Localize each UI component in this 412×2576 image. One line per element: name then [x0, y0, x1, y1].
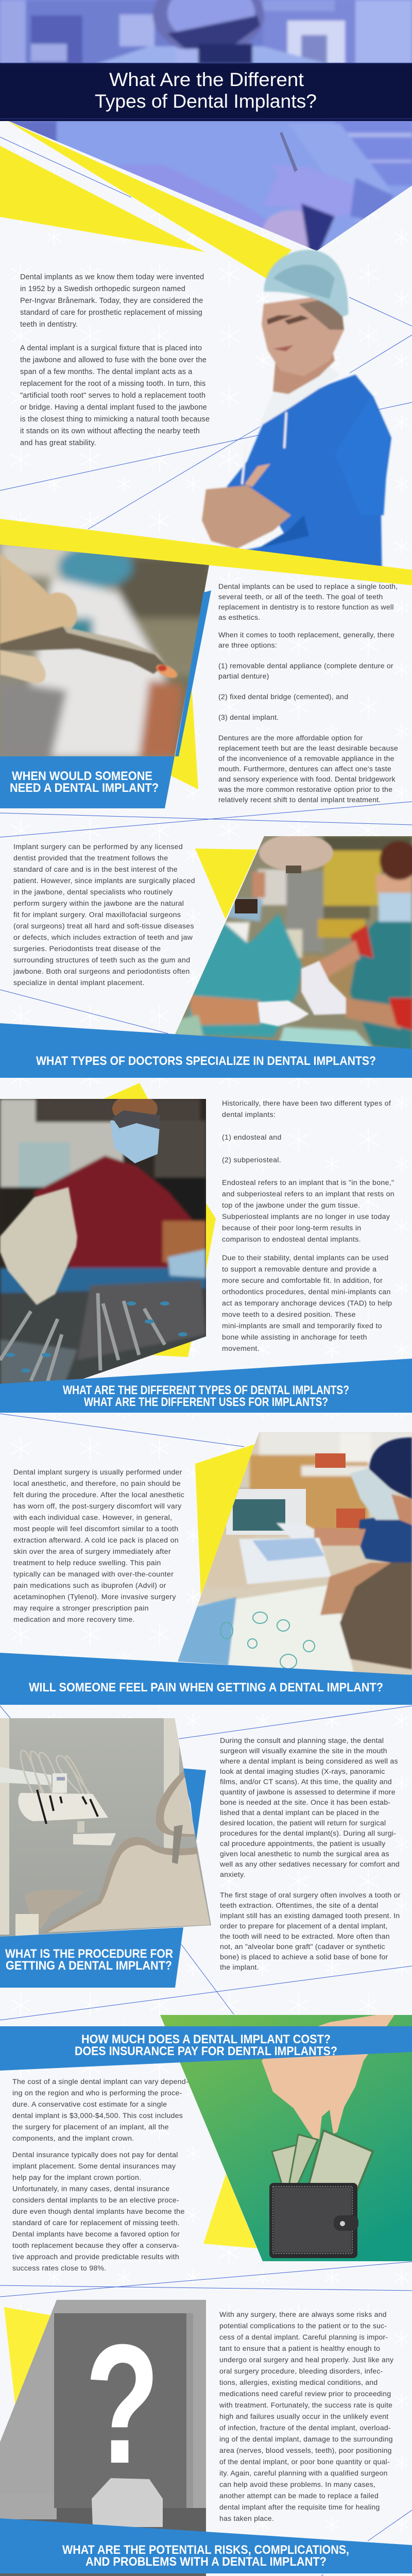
heading: cost and insurance: [0, 2026, 412, 2071]
text block: cost and insurance: success rates close to 98%.: [12, 2264, 107, 2273]
yellow accent beside x-ray photo: [195, 1443, 260, 1596]
text block: procedure stages: not, an "alveolar bone graft" (cadaver or synthetic: [220, 1943, 385, 1951]
text block: pain during surgery: with each individual case. However, in general,: [13, 1514, 172, 1522]
yellow wedges below hero: [0, 121, 291, 279]
photo: masked dentist with instrument tray: [0, 1094, 209, 1391]
text block: types of implants: top of the jawbone under the gum tissue.: [222, 1201, 360, 1210]
text block: types of implants: act as temporary anchorage devices (TAD) to help: [222, 1299, 392, 1308]
text block: when implants are needed: was the more common restorative option prior to the: [218, 786, 392, 794]
title banner: [0, 63, 412, 121]
text block: intro to dental implants: in 1952 by a Swedish orthopedic surgeon named: [20, 285, 185, 293]
text block: cost and insurance: considers dental implants to be an elective proce-: [12, 2196, 179, 2205]
text block: pain during surgery: typically can be managed with over-the-counter: [13, 1570, 174, 1579]
heading: procedure: [0, 1927, 183, 1988]
text block: which doctors place implants: fit for implant surgery. Oral maxillofacial surgeons: [13, 911, 181, 919]
text block: types of implants: Historically, there have been two different types of: [222, 1099, 391, 1108]
text block: cost and insurance: Dental implants have become a favored option for: [12, 2230, 180, 2239]
text block: types of implants: (2) subperiosteal.: [222, 1156, 281, 1164]
thin blue accent lines, upper section: [0, 137, 412, 529]
photo: forceps holding extracted tooth: [0, 541, 211, 757]
text block: risks and complications: high and failures usually occur in the unlikely event: [219, 2412, 388, 2420]
text block: pain during surgery: felt during the procedure. After the local anesthetic: [13, 1491, 184, 1499]
text block: cost and insurance: The cost of a single dental implant can vary depend-: [12, 2078, 188, 2086]
text block: risks and complications: tions, allergies, existing medical conditions, and: [219, 2378, 377, 2386]
text block: risks and complications: cess of a dental implant. Careful planning is impor-: [219, 2333, 388, 2341]
text block: types of implants: comparison to endosteal dental implants. Due to their stability, dental implants can be used: [222, 1235, 388, 1262]
thin blue accent lines: [0, 2262, 412, 2297]
blue accent line: [0, 1414, 244, 1447]
text block: pain during surgery: skin over the area of surgery immediately after: [13, 1548, 171, 1556]
text block: cost and insurance: ing on the region and who is performing the proce-: [12, 2089, 182, 2097]
text block: risks and complications: ity. Again, careful planning with a qualified surgeon: [219, 2469, 388, 2477]
heading: will someone feel pain: [0, 1653, 412, 1705]
text block: cost and insurance: help pay for the implant crown portion.: [12, 2174, 141, 2182]
text block: types of implants: more secure and comfortable fit. In addition, for: [222, 1277, 383, 1285]
text block: when implants are needed: replacement in dentistry is to restore function as well: [218, 603, 394, 612]
text block: types of implants: bone while assisting in anchorage for teeth: [222, 1333, 367, 1342]
text block: cost and insurance: Unfortunately, in many cases, dental insurance: [12, 2185, 169, 2193]
text block: procedure stages: [220, 1737, 401, 1972]
text block: risks and complications: has taken place.: [219, 2514, 274, 2522]
text block: risks and complications: area (nerves, blood vessels, teeth), poor positioning: [219, 2446, 392, 2454]
text block: which doctors place implants: [13, 843, 195, 987]
text block: risks and complications: With any surgery, there are always some risks and: [219, 2310, 387, 2318]
text block: pain during surgery: pain medications such as ibuprofen (Advil) or: [13, 1582, 166, 1590]
photo: person holding sponge with question mark: [0, 2298, 209, 2576]
text block: when implants are needed: and sensory experience with food. Dental bridgework: [218, 775, 396, 784]
text block: which doctors place implants: (oral surgeons) treat all hard and soft-tissue diseases: [13, 922, 194, 930]
text block: intro to dental implants: replacement for the root of a missing tooth. In turn, this: [20, 380, 205, 388]
title text: What Are the Different: [109, 69, 304, 90]
thin blue accent lines, lower-mid section: [0, 1706, 412, 2020]
text block: when implants are needed: (1) removable dental appliance (complete denture or: [218, 662, 393, 670]
text block: procedure stages: bone) is placed to achieve a solid base of bone for: [220, 1953, 388, 1961]
thin blue accent lines: [0, 2510, 412, 2576]
text block: when implants are needed: (2) fixed dental bridge (cemented), and: [218, 693, 348, 701]
text block: cost and insurance: the surgery for placement of an implant, all the: [12, 2123, 169, 2131]
text block: which doctors place implants: surgeries. Periodontists treat disease of the: [13, 945, 161, 953]
text block: types of implants: [222, 1099, 394, 1353]
text block: risks and complications: of the dental implant, or poor bone quantity or qual-: [219, 2458, 390, 2466]
text block: which doctors place implants: standard of care and is in the best interest of the: [13, 866, 178, 874]
text block: types of implants: dental implants:: [222, 1111, 276, 1119]
text block: cost and insurance: tooth replacement because they offer a conserva-: [12, 2242, 179, 2250]
heading: types and uses: WHAT ARE THE DIFFERENT USES FOR IMPLANTS?: [84, 1395, 328, 1409]
heading: what types of doctors: [0, 1023, 412, 1078]
text block: intro to dental implants: span of a few months. The dental implant acts as a: [20, 368, 193, 376]
yellow accent triangle beside forceps photo: [170, 685, 198, 789]
text block: intro to dental implants: A dental implant is a surgical fixture that is placed into: [20, 344, 202, 352]
text block: pain during surgery: may require a stronger prescription pain: [13, 1604, 149, 1613]
text block: intro to dental implants: it stands on its own without affecting the nearby teeth: [20, 427, 200, 435]
yellow accent left of question-mark photo: [4, 2307, 51, 2416]
text block: types of implants: Subperiosteal implants are no longer in use today: [222, 1213, 390, 1221]
text block: procedure stages: the tooth will need to be extracted. More often than: [220, 1933, 390, 1941]
wallet: [269, 2183, 357, 2258]
text block: pain during surgery: local anesthetic, and therefore, no pain should be: [13, 1480, 181, 1488]
surgical cap: [264, 250, 348, 317]
text block: procedure stages: During the consult and planning stage, the dental: [220, 1737, 384, 1745]
heading: will someone feel pain: WILL SOMEONE FEEL PAIN WHEN GETTING A DENTAL IMPLANT?: [29, 1681, 383, 1694]
text block: intro to dental implants: teeth in dentistry.: [20, 320, 78, 329]
text block: procedure stages: given local anesthetic to numb the surgical area as: [220, 1850, 389, 1858]
heading: risks: [0, 2518, 412, 2573]
text block: pain during surgery: medication and more recovery time.: [13, 1616, 135, 1624]
text block: types of implants: orthodontics procedures, dental mini-implants can: [222, 1288, 391, 1296]
text block: cost and insurance: components, and the implant crown. Dental insurance typically does not pay for dental: [12, 2134, 178, 2159]
text block: cost and insurance: tive approach and provide predictable results with: [12, 2253, 179, 2261]
thin blue accent lines, mid section: [0, 802, 412, 1033]
text block: cost and insurance: standard of care for replacement of missing teeth.: [12, 2219, 180, 2227]
text block: risks and complications: undergo oral surgery and heal properly. Just like any: [219, 2355, 393, 2364]
scrubs: [227, 375, 391, 582]
text block: types of implants: Endosteal refers to an implant that is "in the bone,": [222, 1179, 394, 1187]
heading: procedure: GETTING A DENTAL IMPLANT?: [6, 1959, 172, 1973]
cut-out photo: surgeon in blue scrubs: [202, 250, 391, 582]
text block: pain during surgery: acetaminophen (Tylenol). More invasive surgery: [13, 1593, 176, 1601]
text block: risks and complications: [219, 2310, 393, 2522]
text block: intro to dental implants: and has great stability.: [20, 439, 96, 447]
text block: intro to dental implants: or bridge. Having a dental implant fused to the jawbone: [20, 403, 207, 412]
text block: procedure stages: anxiety.: [220, 1871, 245, 1879]
text block: procedure stages: desired location, the patient will return for surgical: [220, 1819, 386, 1827]
text block: when implants are needed: partial denture): [218, 672, 269, 681]
text block: intro to dental implants: Per-Ingvar Brånemark. Today, they are considered the: [20, 297, 203, 305]
heading: cost and insurance: DOES INSURANCE PAY FOR DENTAL IMPLANTS?: [75, 2044, 337, 2058]
heading: cost and insurance: HOW MUCH DOES A DENTAL IMPLANT COST?: [81, 2032, 331, 2046]
arm: [202, 485, 291, 549]
text block: intro to dental implants: standard of care for prosthetic replacement of missing: [20, 309, 202, 317]
text block: procedure stages: well as any other sedatives necessary for comfort and: [220, 1860, 400, 1869]
text block: cost and insurance: implant placement. Some dental insurances may: [12, 2162, 176, 2171]
text block: intro to dental implants: [20, 273, 210, 447]
text block: types of implants: because of their poor long-term results in: [222, 1224, 361, 1232]
yellow triangle behind surgical team photo: [195, 849, 258, 919]
banknotes: [272, 2145, 297, 2185]
text block: when implants are needed: of the inconvenience of a removable appliance in the: [218, 755, 394, 763]
text block: when implants are needed: [218, 583, 398, 804]
heading: types and uses: WHAT ARE THE DIFFERENT TYPES OF DENTAL IMPLANTS?: [63, 1383, 349, 1397]
text block: procedure stages: order to prepare for placement of a dental implant,: [220, 1922, 388, 1930]
text block: types of implants: and subperiosteal refers to an implant that rests on: [222, 1190, 394, 1198]
heading: what types of doctors: WHAT TYPES OF DOCTORS SPECIALIZE IN DENTAL IMPLANTS?: [36, 1054, 376, 1068]
text block: which doctors place implants: dentist provided that the treatment follows the: [13, 854, 168, 862]
text block: procedure stages: surgeon will visually examine the site in the mouth: [220, 1747, 387, 1755]
text block: procedure stages: where a dental implant is being considered as well as: [220, 1757, 398, 1766]
text block: which doctors place implants: specialize in dental implant placement.: [13, 979, 145, 987]
yellow diagonal band: [0, 519, 412, 585]
text block: which doctors place implants: in the jawbone, dental specialists who routinely: [13, 888, 173, 896]
heading: procedure: WHAT IS THE PROCEDURE FOR: [5, 1947, 173, 1961]
heading: risks: AND PROBLEMS WITH A DENTAL IMPLANT?: [85, 2555, 327, 2569]
text block: risks and complications: another attempt can be made to replace a failed: [219, 2492, 379, 2500]
heading: types and uses: [0, 1359, 412, 1413]
text block: risks and complications: oral surgery procedure, bleeding disorders, infec-: [219, 2367, 383, 2375]
text block: types of implants: move teeth to a desired position. These: [222, 1311, 356, 1319]
text block: when implants are needed: replacement teeth but are the least desirable because: [218, 744, 398, 753]
text block: types of implants: (1) endosteal and: [222, 1133, 282, 1142]
text block: which doctors place implants: perform surgery within the jawbone are the natural: [13, 900, 184, 908]
photo: dentist reviewing x-ray with patient: [175, 1430, 412, 1680]
text block: cost and insurance: dental implant is $3,000-$4,500. This cost includes: [12, 2112, 183, 2120]
text block: procedure stages: films, and/or CT scans). At this time, the quality and: [220, 1778, 392, 1786]
text block: when implants are needed: are three options:: [218, 641, 277, 650]
text block: when implants are needed: mouth. Furthermore, dentures can affect one's taste: [218, 765, 391, 773]
blue accent strip: [175, 590, 211, 756]
hand: [262, 2012, 397, 2139]
text block: procedure stages: bone is needed at the site. Once it has been estab-: [220, 1799, 390, 1807]
text block: procedure stages: lished that a dental implant can be placed in the: [220, 1809, 380, 1817]
photo: hand and wallet on green: [157, 2012, 412, 2264]
text block: which doctors place implants: surrounding structures of teeth such as the gum and: [13, 956, 190, 964]
text block: which doctors place implants: or defects, which includes extraction of teeth and jaw: [13, 934, 193, 942]
text block: risks and complications: tant to ensure that a patient is healthy enough to: [219, 2344, 380, 2352]
photo: surgical team at work: [170, 834, 412, 1054]
text block: pain during surgery: has worn off, the post-surgery discomfort will vary: [13, 1502, 181, 1511]
text block: when implants are needed: relatively recent shift to dental implant treatment.: [218, 796, 381, 804]
text block: procedure stages: the implant.: [220, 1963, 259, 1972]
collar: [258, 366, 340, 428]
question mark: ?: [85, 2309, 160, 2499]
heading: risks: WHAT ARE THE POTENTIAL RISKS, COMPLICATIONS,: [62, 2543, 349, 2557]
text block: cost and insurance: [12, 2078, 188, 2273]
text block: risks and complications: with treatment. Fortunately, the success rate is quite: [219, 2401, 392, 2409]
text block: when implants are needed: (3) dental implant.: [218, 714, 279, 722]
text block: risks and complications: dental implant after the requisite time for healing: [219, 2503, 380, 2511]
hero photo: dentist treating patient, blue tint: [0, 0, 412, 255]
text block: which doctors place implants: jawbone. Both oral surgeons and periodontists often: [13, 968, 190, 976]
blue accent shape behind chair photo: [180, 1768, 206, 1844]
text block: pain during surgery: treatment to help reduce swelling. This pain: [13, 1559, 161, 1567]
text block: procedure stages: look at dental imaging studies (X-rays, panoramic: [220, 1768, 385, 1776]
heading: when would someone need an implant: [0, 756, 175, 808]
text block: types of implants: mini-implants are small and temporarily fixed to: [222, 1322, 382, 1330]
text block: risks and complications: can help avoid these problems. In many cases,: [219, 2480, 375, 2488]
text block: risks and complications: ing of the dental implant, damage to the surrounding: [219, 2435, 393, 2443]
text block: risks and complications: of infection, fracture of the dental implant, overload-: [219, 2424, 391, 2432]
text block: pain during surgery: [13, 1468, 184, 1624]
text block: intro to dental implants: is the closest thing to mimicking a natural tooth because: [20, 415, 210, 423]
heading: when would someone need an implant: WHEN WOULD SOMEONE: [12, 769, 152, 783]
neck and face: [272, 353, 336, 395]
text block: procedure stages: quantity of jawbone is assessed to determine if more: [220, 1788, 396, 1797]
text block: risks and complications: potential complications to the patient or to the suc-: [219, 2321, 387, 2330]
title text: Types of Dental Implants?: [95, 91, 317, 112]
text block: intro to dental implants: Dental implants as we know them today were invented: [20, 273, 204, 281]
text block: pain during surgery: most people will feel discomfort similar to a tooth: [13, 1525, 178, 1533]
text block: types of implants: movement.: [222, 1345, 260, 1353]
text block: when implants are needed: several teeth, or all of the teeth. The goal of teeth: [218, 593, 383, 601]
text block: cost and insurance: dure even though dental implants have become the: [12, 2208, 185, 2216]
text block: when implants are needed: as esthetics. When it comes to tooth replacement, generally, there: [218, 614, 394, 639]
text block: procedure stages: teeth extraction. Oftentimes, the site of a dental: [220, 1902, 378, 1910]
heading: when would someone need an implant: NEED A DENTAL IMPLANT?: [10, 781, 159, 795]
yellow accents around masked dentist photo: [102, 1083, 216, 1357]
text block: which doctors place implants: patient. However, since implants are surgically placed: [13, 877, 195, 885]
text block: which doctors place implants: Implant surgery can be performed by any licensed: [13, 843, 183, 851]
text block: when implants are needed: Dental implants can be used to replace a single tooth,: [218, 583, 398, 591]
text block: procedure stages: The first stage of oral surgery often involves a tooth or: [220, 1891, 401, 1900]
text block: procedure stages: implant still has an existing damaged tooth present. In: [220, 1912, 400, 1920]
text block: procedure stages: procedures for the dental implant(s). During all surgi-: [220, 1829, 396, 1838]
text block: intro to dental implants: the jawbone and allowed to fuse with the bone over the: [20, 356, 207, 364]
text block: types of implants: to support a removable denture and provide a: [222, 1265, 376, 1274]
text block: cost and insurance: dure. A conservative cost estimate for a single: [12, 2100, 167, 2109]
text block: risks and complications: medications need careful review prior to proceeding: [219, 2389, 391, 2398]
text block: when implants are needed: Dentures are the more affordable option for: [218, 734, 363, 742]
photo: dental chair and instrument unit: [0, 1718, 214, 1940]
yellow accent behind wallet photo: [203, 2174, 257, 2248]
text block: intro to dental implants: "artificial tooth root" serves to hold a replacement tooth: [20, 392, 205, 400]
text block: pain during surgery: Dental implant surgery is usually performed under: [13, 1468, 182, 1477]
text block: pain during surgery: extraction afterward. A cold ice pack is placed on: [13, 1536, 179, 1545]
text block: procedure stages: cal procedure appointments, the patient is usually: [220, 1840, 386, 1848]
